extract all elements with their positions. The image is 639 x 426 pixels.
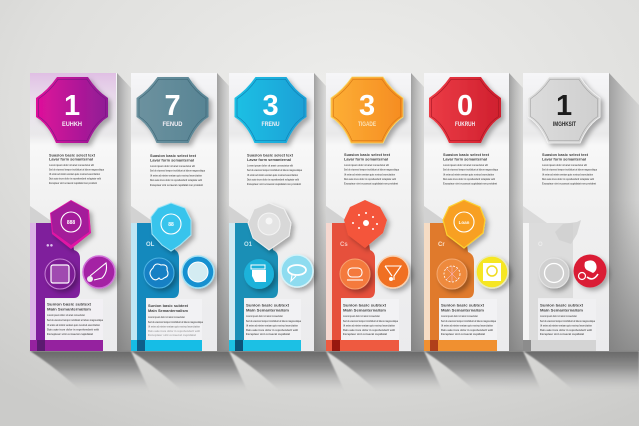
hexagon icon <box>344 200 387 248</box>
card <box>326 73 411 351</box>
grey corner shading <box>326 206 350 223</box>
lower text <box>441 304 497 336</box>
number badge: 7 <box>164 90 181 122</box>
lower text: Sed do eiusmod tempor incididunt ut labore magna aliqua <box>540 320 596 323</box>
small icon: O <box>538 242 543 248</box>
lower text: Main Semanternalism <box>246 308 290 312</box>
upper text: Ut enim ad minim veniam quis nostrud exercitation <box>247 174 298 177</box>
lower text: Main Semanternalism <box>343 308 387 312</box>
lower text: Excepteur sint occaecat cupidatat <box>540 333 584 336</box>
lower text: Sed do eiusmod tempor incididunt ut labore magna aliqua <box>343 320 399 323</box>
lower text card <box>146 299 202 340</box>
upper text: Excepteur sint occaecat cupidatat non proident <box>49 182 97 185</box>
upper text: Lavar form semanternal <box>344 158 388 162</box>
number badge <box>528 77 600 143</box>
upper text: Excepteur sint occaecat cupidatat non proident <box>247 183 301 186</box>
upper text <box>542 153 598 186</box>
number badge: 1 <box>556 90 572 122</box>
upper text <box>247 154 303 186</box>
upper text: Ut enim ad minim veniam quis nostrud exercitation <box>344 174 395 176</box>
upper text <box>344 153 400 186</box>
circle icon: cup <box>340 259 370 289</box>
small icon: Cr <box>438 242 445 248</box>
lower text: Lorem ipsum dolor sit amet consectetur <box>343 315 380 318</box>
lower text: Duis aute irure dolor in reprehenderit velit <box>148 330 200 333</box>
upper text <box>443 153 499 186</box>
lower text: Excepteur sint occaecat cupidatat <box>47 333 93 336</box>
small icon: Cs <box>340 242 348 248</box>
upper text: Suasion basic select text <box>247 154 294 158</box>
number badge: 0 <box>457 90 473 122</box>
upper text <box>150 154 206 187</box>
lower text: Main Semanternalism <box>441 308 485 312</box>
hexagon icon <box>50 200 91 249</box>
upper text: Sed do eiusmod tempor incididunt ut labore magna aliqua <box>247 169 303 172</box>
orange block <box>430 223 474 340</box>
light strip <box>424 223 430 340</box>
number badge: FRENU <box>262 121 280 128</box>
circle icon: speech ring <box>281 255 313 287</box>
lower text <box>148 304 204 337</box>
number badge: 1 <box>64 90 80 122</box>
number badge <box>36 77 108 143</box>
hexagon icon <box>248 203 291 250</box>
circle icon: red <box>574 254 606 288</box>
lower text: Duis aute irure dolor in reprehenderit velit <box>246 329 298 332</box>
lower text: Ut enim ad minim veniam quis nostrud exercitation <box>47 324 100 327</box>
footer band <box>326 340 399 351</box>
lower text: Excepteur sint occaecat cupidatat <box>148 334 196 337</box>
circle icon: square <box>45 259 75 289</box>
lower text: Ut enim ad minim veniam quis nostrud exercitation <box>343 324 395 328</box>
small icon: ●● <box>46 243 54 249</box>
card <box>30 73 117 351</box>
number badge <box>331 77 403 143</box>
upper text: Lorem ipsum dolor sit amet consectetur elit <box>443 164 488 167</box>
upper text: Lorem ipsum dolor sit amet consectetur elit <box>542 164 587 167</box>
upper text: Duis aute irure dolor in reprehenderit voluptate velit <box>247 178 299 182</box>
lower text card <box>244 299 301 340</box>
panel 6: grey <box>523 73 609 351</box>
hexagon icon <box>151 203 191 251</box>
red block <box>332 223 375 340</box>
panel 4: orange and red <box>326 73 411 351</box>
lower text: Ut enim ad minim veniam quis nostrud exercitation <box>246 324 298 328</box>
lower text: Sunion basic subtext <box>441 304 485 308</box>
lower text: Duis aute irure dolor in reprehenderit velit <box>47 328 99 332</box>
lower text: Main Semanternalism <box>540 308 584 312</box>
number badge: TIGADE <box>358 121 376 128</box>
footer square <box>137 340 145 351</box>
lower text: Sunion basic subtext <box>148 304 189 308</box>
upper text: Lorem ipsum dolor sit amet consectetur elit <box>344 164 389 167</box>
upper text: Excepteur sint occaecat cupidatat non proident <box>542 182 596 186</box>
circle icon: cloud <box>144 258 174 288</box>
lower text: Duis aute irure dolor in reprehenderit velit <box>540 329 592 332</box>
grey corner shading <box>229 206 253 223</box>
upper text: Ut enim ad minim veniam quis nostrud exercitation <box>49 173 100 176</box>
lower text: Ut enim ad minim veniam quis nostrud exercitation <box>540 324 592 328</box>
lower text: Duis aute irure dolor in reprehenderit velit <box>343 329 395 332</box>
circle icon: yellow square <box>476 256 508 288</box>
upper text: Excepteur sint occaecat cupidatat non proident <box>344 182 398 186</box>
card <box>131 73 217 351</box>
lower text: Excepteur sint occaecat cupidatat <box>441 333 485 336</box>
upper text: Sed do eiusmod tempor incididunt ut labore magna aliqua <box>443 168 499 172</box>
footer band <box>131 340 202 351</box>
lower text card <box>45 299 103 340</box>
upper text: Lavar form semanternal <box>247 158 291 162</box>
panel 2: teal and blue <box>131 73 217 351</box>
footer band <box>30 340 103 351</box>
upper text: Suasion basic select text <box>443 153 490 157</box>
upper text: Lorem ipsum dolor sit amet consectetur elit <box>247 164 293 168</box>
circle icon: funnel <box>377 256 409 288</box>
lower text: Main Semanternalism <box>148 309 189 313</box>
lower text <box>246 304 302 336</box>
footer band <box>523 340 596 351</box>
lower text card <box>538 299 596 340</box>
long panel shadows <box>30 73 639 392</box>
lower text: Excepteur sint occaecat cupidatat <box>343 333 387 336</box>
light strip <box>523 223 529 340</box>
circle icon: grey ring <box>539 258 569 288</box>
upper text: Lavar form semanternal <box>49 158 93 162</box>
panel 1: magenta <box>30 73 117 351</box>
faint icon cluster <box>555 220 581 244</box>
upper text: Suasion basic select text <box>150 154 197 158</box>
grey corner shading <box>523 206 547 223</box>
number badge: IMGHKSIT <box>553 121 576 128</box>
card <box>523 73 609 351</box>
circle icon: folder <box>244 259 274 289</box>
upper text: Lorem ipsum dolor sit amet consectetur elit <box>150 165 195 168</box>
upper text: Lavar form semanternal <box>150 158 194 162</box>
upper text: Duis aute irure dolor in reprehenderit voluptate velit <box>443 178 495 181</box>
upper text: Lorem ipsum dolor sit amet consectetur elit <box>49 164 94 167</box>
number badge <box>429 77 501 143</box>
tinted top <box>30 73 116 142</box>
number badge <box>136 77 208 143</box>
card <box>424 73 509 351</box>
coloured block <box>30 223 36 340</box>
card <box>229 73 314 351</box>
number badge: 3 <box>262 90 279 122</box>
upper text: Suasion basic select text <box>49 154 96 158</box>
lower text: Sed do eiusmod tempor incididunt ut labore magna aliqua <box>148 321 204 324</box>
lower text <box>343 304 399 336</box>
upper text: Excepteur sint occaecat cupidatat non proident <box>443 182 497 186</box>
upper text: Sed do eiusmod tempor incididunt ut labore magna aliqua <box>542 168 598 172</box>
light strip <box>131 223 137 340</box>
blue block <box>137 223 179 340</box>
number badge: FUKRUH <box>455 121 475 128</box>
grey block <box>529 223 573 340</box>
footer square <box>332 340 340 351</box>
circle icon: network <box>437 259 467 289</box>
upper text: Sed do eiusmod tempor incididunt ut labore magna aliqua <box>49 168 105 172</box>
footer square <box>235 340 243 351</box>
circle icon: leaf <box>83 256 115 288</box>
lower text: Lorem ipsum dolor sit amet consectetur <box>441 315 478 318</box>
number badge <box>234 77 306 143</box>
lower text: Sed do eiusmod tempor incididunt ut labore magna aliqua <box>441 320 497 323</box>
number badge: FENUD <box>162 121 183 128</box>
grey corner shading <box>131 206 155 223</box>
hexagon icon: 88 <box>168 222 174 228</box>
upper text: Sed do eiusmod tempor incididunt ut labore magna aliqua <box>344 168 400 172</box>
hexagon icon <box>443 200 485 248</box>
upper text <box>49 154 105 185</box>
light strip <box>326 223 332 340</box>
hexagon icon: 888 <box>67 220 75 226</box>
hexagon icon: Loan <box>459 220 470 225</box>
upper text: Ut enim ad minim veniam quis nostrud exercitation <box>542 174 593 176</box>
lower text: Sed do eiusmod tempor incididunt ut labore magna aliqua <box>246 320 302 323</box>
lower text: Lorem ipsum dolor sit amet consectetur <box>540 315 577 318</box>
upper text: Duis aute irure dolor in reprehenderit voluptate velit <box>542 178 594 181</box>
upper text: Duis aute irure dolor in reprehenderit voluptate velit <box>49 178 101 180</box>
lower text: Sed do eiusmod tempor incididunt ut labore magna aliqua <box>47 319 104 322</box>
upper text: Duis aute irure dolor in reprehenderit voluptate velit <box>150 179 202 182</box>
number badge: 3 <box>359 90 375 122</box>
lower text: Sunion basic subtext <box>246 304 290 308</box>
panel 3: cyan <box>229 73 314 351</box>
lower text: Ut enim ad minim veniam quis nostrud exercitation <box>441 324 493 328</box>
number badge: EUHKH <box>62 121 82 128</box>
small icon: O1 <box>244 242 253 248</box>
panel 5: red and amber <box>424 73 509 351</box>
purple block <box>36 223 80 340</box>
lower text: Lorem ipsum dolor sit amet consectetur <box>246 315 283 318</box>
lower text: Duis aute irure dolor in reprehenderit velit <box>441 329 493 332</box>
upper text: Suasion basic select text <box>344 153 391 157</box>
small icon: OL <box>146 242 155 248</box>
upper text: Sed do eiusmod tempor incididunt ut labore magna aliqua <box>150 170 206 172</box>
grey corner shading <box>30 206 54 223</box>
lower text: Main Semanternalism <box>47 308 92 312</box>
lower text <box>47 302 104 336</box>
footer band <box>424 340 497 351</box>
lower text card <box>439 299 497 340</box>
footer square <box>430 340 438 351</box>
lower text: Sunion basic subtext <box>343 304 387 308</box>
upper text: Lavar form semanternal <box>542 158 586 162</box>
lower text card <box>341 299 399 340</box>
footer square <box>523 340 531 351</box>
lower text: Ut enim ad minim veniam quis nostrud exercitation <box>148 326 200 328</box>
lower text: Sunion basic subtext <box>47 302 92 306</box>
upper text: Duis aute irure dolor in reprehenderit voluptate velit <box>344 178 396 181</box>
footer square <box>37 340 45 351</box>
light strip <box>229 223 235 340</box>
teal block <box>235 223 278 340</box>
upper text: Ut enim ad minim veniam quis nostrud exercitation <box>443 174 494 176</box>
upper text: Suasion basic select text <box>542 153 589 157</box>
lower text: Excepteur sint occaecat cupidatat <box>246 333 290 336</box>
upper text: Lavar form semanternal <box>443 158 487 162</box>
lower text: Lorem ipsum dolor sit amet consectetur <box>47 314 85 317</box>
upper text: Ut enim ad minim veniam quis nostrud exercitation <box>150 174 202 178</box>
lower text: Sunion basic subtext <box>540 304 584 308</box>
footer band <box>229 340 301 351</box>
upper text: Excepteur sint occaecat cupidatat non proident <box>150 184 203 187</box>
lower text: Lorem ipsum dolor sit amet consectetur <box>148 316 185 319</box>
grey corner shading <box>424 206 448 223</box>
circle icon: dots <box>182 256 214 288</box>
lower text <box>540 304 596 336</box>
